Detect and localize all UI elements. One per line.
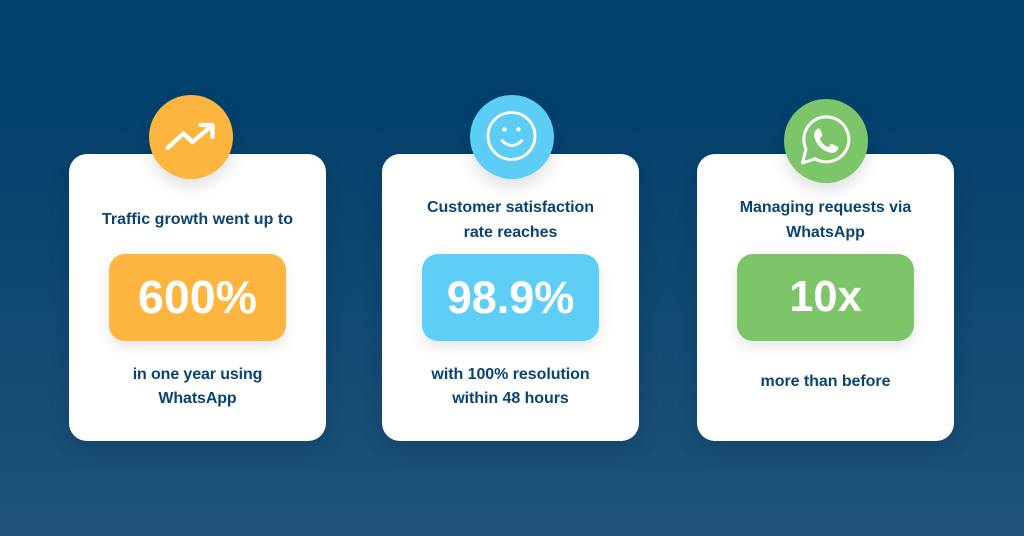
stat: 98.9%: 98.9%	[447, 272, 574, 323]
text: satisfaction intro: rate reaches	[464, 224, 557, 240]
text: requests intro: WhatsApp	[786, 224, 865, 240]
stat: 600%: 600%	[138, 271, 257, 323]
text: traffic intro: Traffic growth went up to	[102, 210, 293, 228]
text: traffic outcome	[133, 366, 262, 407]
text: traffic outcome: in one year using	[133, 366, 262, 382]
stat: 10x	[737, 254, 914, 341]
panel: customer satisfaction	[382, 154, 639, 441]
text: satisfaction intro	[427, 199, 594, 240]
icon: smiley face	[470, 95, 554, 179]
text: satisfaction outcome: within 48 hours	[452, 390, 569, 407]
text: satisfaction outcome	[431, 366, 590, 407]
panel: traffic growth	[69, 154, 326, 441]
text: satisfaction intro: Customer satisfaction	[427, 199, 594, 216]
stat: 98.9%	[422, 254, 599, 341]
text: requests intro: Managing requests via	[740, 199, 911, 216]
stat: 10x: 10x	[789, 273, 862, 321]
text: requests intro	[740, 199, 912, 240]
panel: whatsapp requests	[697, 154, 954, 441]
icon: trending up arrow	[148, 95, 232, 179]
stat: 600%	[109, 254, 286, 341]
text: traffic outcome: WhatsApp	[158, 390, 237, 407]
icon: whatsapp logo	[784, 99, 868, 183]
text: requests outcome: more than before	[761, 372, 890, 390]
text: satisfaction outcome: with 100% resolution	[431, 366, 590, 382]
